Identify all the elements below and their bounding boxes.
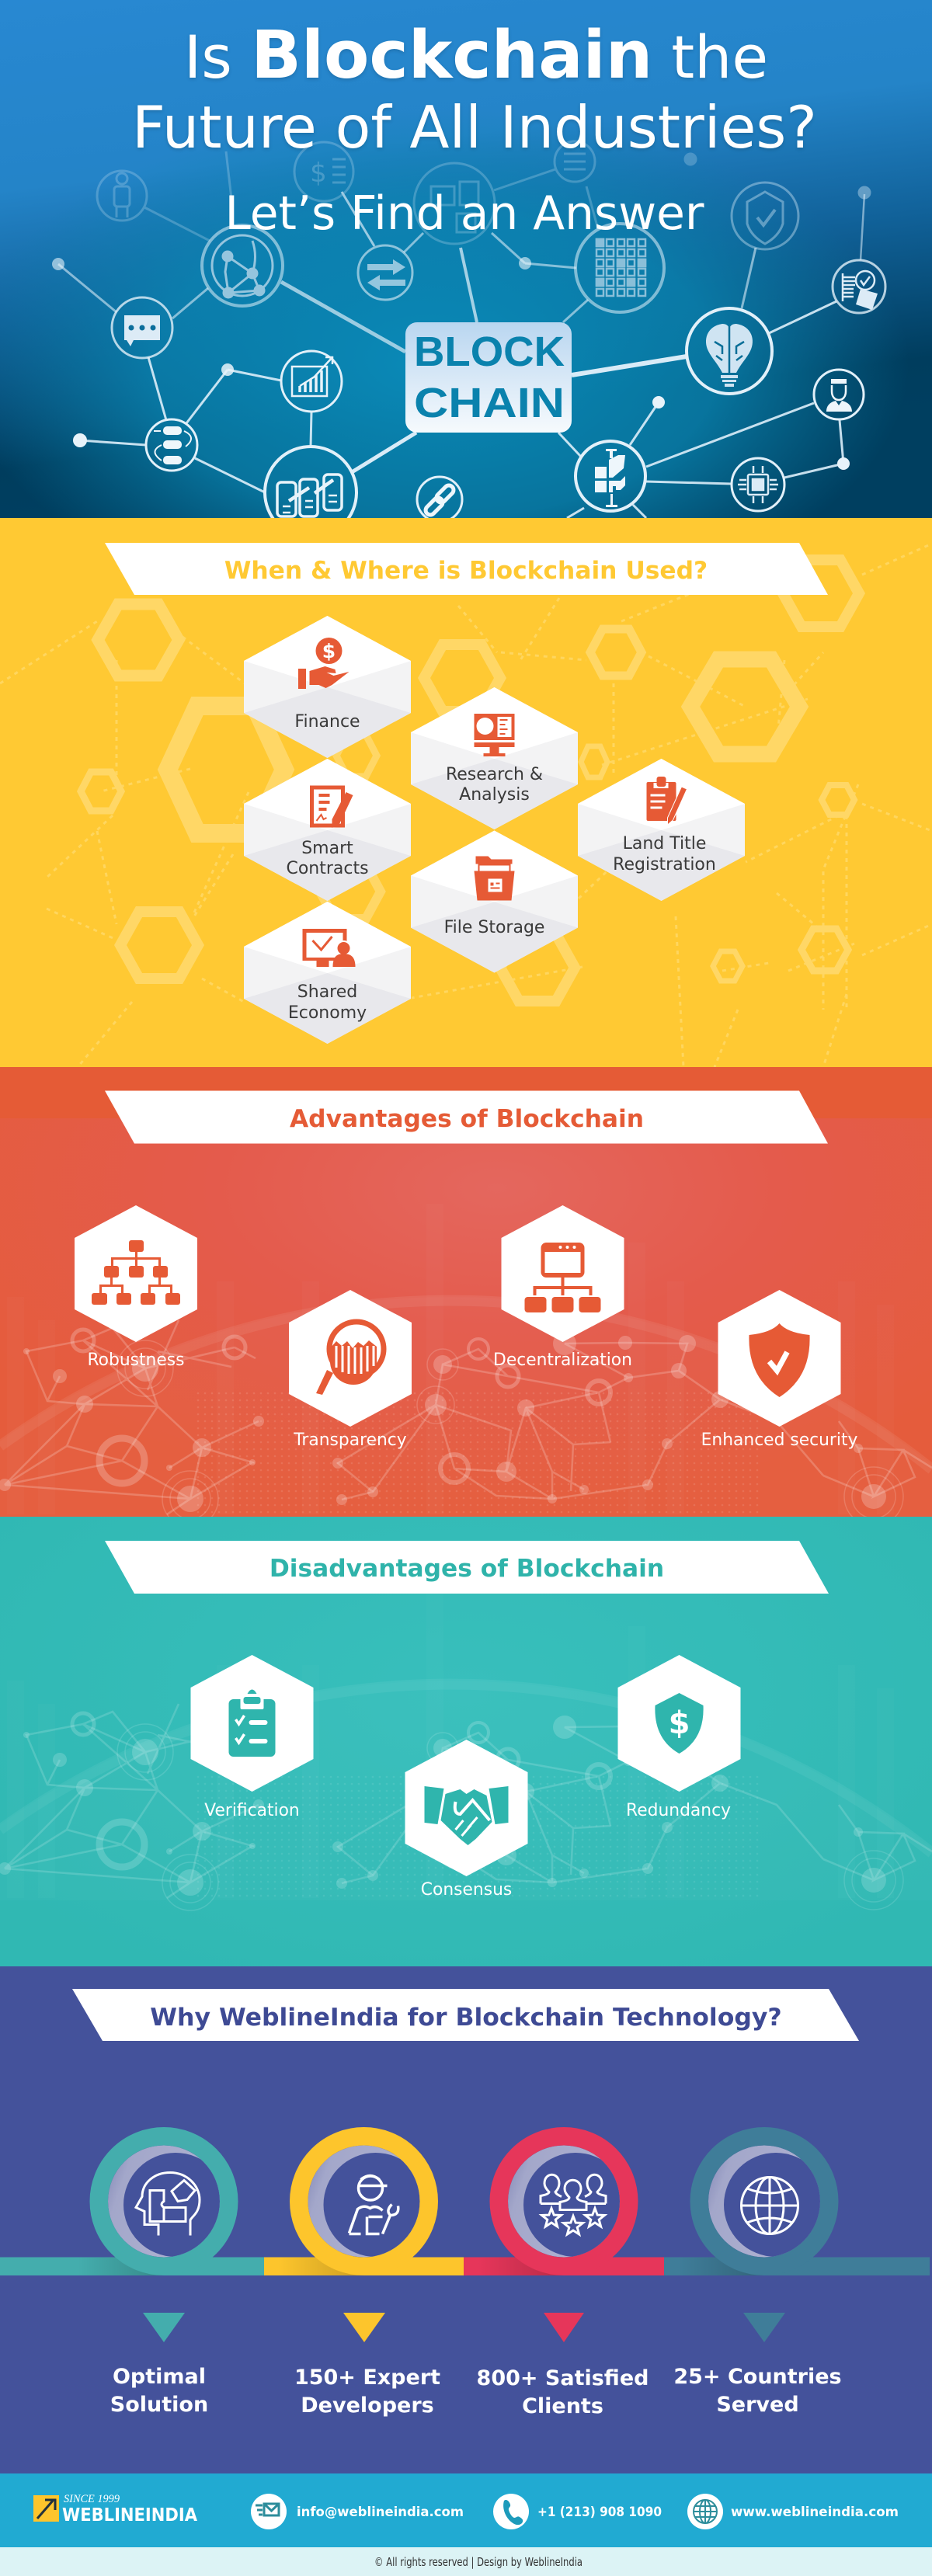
card: Transparency: [289, 1290, 412, 1427]
panel: advantages: [0, 1067, 932, 1527]
card: Smart Contracts: [244, 759, 411, 901]
card: Land Title Registration: [578, 759, 745, 901]
label: Countries Served: Served: [716, 2393, 799, 2417]
card: Research & Analysis: Research &: [446, 765, 543, 784]
icon: clipboard and pen: [646, 777, 687, 825]
copyright: © All rights reserved | Design by WeblineIndia: [374, 2555, 582, 2569]
contact: phone: [493, 2494, 662, 2529]
logo: WEBLINEINDIA: [62, 2505, 197, 2526]
icon: cubes: [595, 449, 625, 507]
icon: monitor and person: [303, 929, 356, 967]
panel: hero header: [0, 0, 932, 538]
section heading: Why WeblineIndia for Blockchain Technology?: [150, 2004, 782, 2032]
card: Smart Contracts: Contracts: [286, 859, 369, 878]
subtitle: Let’s Find an Answer: [225, 186, 704, 241]
ring: Expert Developers: [299, 2136, 429, 2266]
icon: dollar shield: $: [669, 1705, 690, 1741]
icon: dollar shield: [655, 1693, 704, 1754]
icon: chain link: [424, 484, 455, 516]
icon: globe: [741, 2178, 798, 2234]
background hexagons: [81, 560, 859, 1001]
icon: magnifier chart: [316, 1322, 384, 1395]
icon: shield check: [749, 1323, 810, 1397]
icon: faded shield: [732, 183, 870, 249]
card: Decentralization: Decentralization: [493, 1351, 632, 1370]
contact: email: [251, 2494, 464, 2529]
card: Research & Analysis: [411, 687, 578, 829]
section heading: [105, 1090, 828, 1143]
icon: linked servers: [277, 475, 342, 516]
label: Countries Served: 25+ Countries: [673, 2365, 842, 2389]
card: Smart Contracts: Smart: [301, 839, 353, 858]
icon: brain bulb: [706, 324, 753, 387]
background network globe: [0, 1679, 932, 1911]
contact: website: www.weblineindia.com: [731, 2505, 899, 2520]
icon: data grid: [596, 239, 645, 296]
icon: handshake: [424, 1786, 508, 1845]
card: Finance: [244, 616, 411, 758]
card: Land Title Registration: Registration: [613, 855, 716, 874]
icon: head with puzzle: [136, 2173, 200, 2235]
icon: network server: [525, 1243, 601, 1312]
icon: microchip: [738, 466, 778, 503]
icon: document check: [843, 271, 878, 310]
icon: contract and pen: [312, 787, 353, 828]
card: Verification: [191, 1655, 314, 1820]
card: File Storage: [411, 831, 578, 972]
icon: person: [826, 379, 852, 412]
icon: hand with coin: [298, 638, 350, 689]
icon: binary arrows: [367, 259, 405, 290]
card: Robustness: [75, 1205, 197, 1370]
panel: where blockchain is used: [0, 518, 932, 1067]
blockchain box: BLOCK: [414, 329, 565, 375]
icon: developer: [350, 2176, 398, 2234]
card: Redundancy: Redundancy: [626, 1801, 731, 1820]
label: Satisfied Clients: 800+ Satisfied: [477, 2366, 649, 2390]
blockchain box: [405, 322, 572, 433]
logo: [33, 2493, 197, 2526]
network: connector lines: [58, 192, 864, 518]
section heading: [105, 543, 828, 595]
label: Expert Developers: Developers: [301, 2393, 434, 2418]
title: Is Blockchain the: [184, 17, 768, 94]
card: Shared Economy: [244, 902, 411, 1044]
label: Satisfied Clients: Clients: [522, 2394, 603, 2418]
card: Robustness: Robustness: [87, 1351, 185, 1370]
icon: folder: [474, 856, 514, 901]
card: Verification: Verification: [204, 1801, 300, 1820]
section heading: [72, 1989, 859, 2041]
icon: chart growth: [292, 357, 332, 396]
label: Transparency: Transparency: [293, 1431, 407, 1450]
logo: SINCE 1999: [64, 2493, 120, 2505]
background dotted network: [0, 544, 932, 1067]
icon: monitor with chart: [474, 714, 514, 756]
icon: people and stars: [541, 2174, 606, 2234]
ring: Satisfied Clients: [499, 2136, 629, 2266]
card: File Storage: File Storage: [444, 918, 544, 937]
network: node dots: [52, 257, 850, 470]
icon: hand with coin: $: [322, 640, 336, 662]
card: Shared Economy: Shared: [297, 982, 357, 1002]
icon: hierarchy: [92, 1240, 180, 1305]
card: Enhanced security: [701, 1290, 857, 1450]
ring: Countries Served: [699, 2136, 829, 2266]
icon: process flow: [154, 426, 191, 464]
panel: disadvantages: [0, 1517, 932, 1966]
section heading: Disadvantages of Blockchain: [270, 1555, 664, 1583]
card: Consensus: Consensus: [421, 1880, 512, 1900]
panel: footer: [0, 2473, 932, 2576]
label: Optimal Solution: Optimal: [113, 2365, 206, 2389]
card: Consensus: [405, 1740, 528, 1900]
timeline band: [0, 2257, 930, 2275]
label: Optimal Solution: Solution: [110, 2393, 208, 2417]
card: Shared Economy: Economy: [288, 1003, 367, 1023]
card: Land Title Registration: Land Title: [623, 834, 706, 853]
label: Expert Developers: 150+ Expert: [294, 2366, 440, 2390]
card: Decentralization: [493, 1205, 632, 1370]
network: faded top nodes: [97, 141, 696, 246]
ring: Optimal Solution: [99, 2136, 229, 2266]
icon: globe: [212, 235, 273, 297]
section heading: [105, 1541, 829, 1594]
panel: why WeblineIndia: [0, 1966, 932, 2473]
section heading: When & Where is Blockchain Used?: [224, 557, 708, 585]
blockchain box: CHAIN: [414, 380, 565, 426]
pointer triangles: [143, 2313, 785, 2342]
network: icon circles: [112, 224, 885, 538]
card: Redundancy: [618, 1655, 741, 1820]
title: Future of All Industries?: [132, 94, 817, 162]
background network globe: [0, 1295, 932, 1517]
network: faded top nodes: $: [310, 158, 327, 189]
icon: checklist clipboard: [228, 1690, 275, 1757]
contact: website: [687, 2494, 899, 2529]
title: [137, 28, 814, 151]
icon: chat bubble: [124, 315, 160, 346]
contact: email: info@weblineindia.com: [297, 2505, 464, 2520]
contact: phone: +1 (213) 908 1090: [537, 2505, 662, 2520]
card: Finance: Finance: [294, 712, 360, 732]
card: Enhanced security: Enhanced security: [701, 1431, 857, 1450]
section heading: Advantages of Blockchain: [290, 1105, 644, 1133]
card: Research & Analysis: Analysis: [459, 785, 530, 805]
